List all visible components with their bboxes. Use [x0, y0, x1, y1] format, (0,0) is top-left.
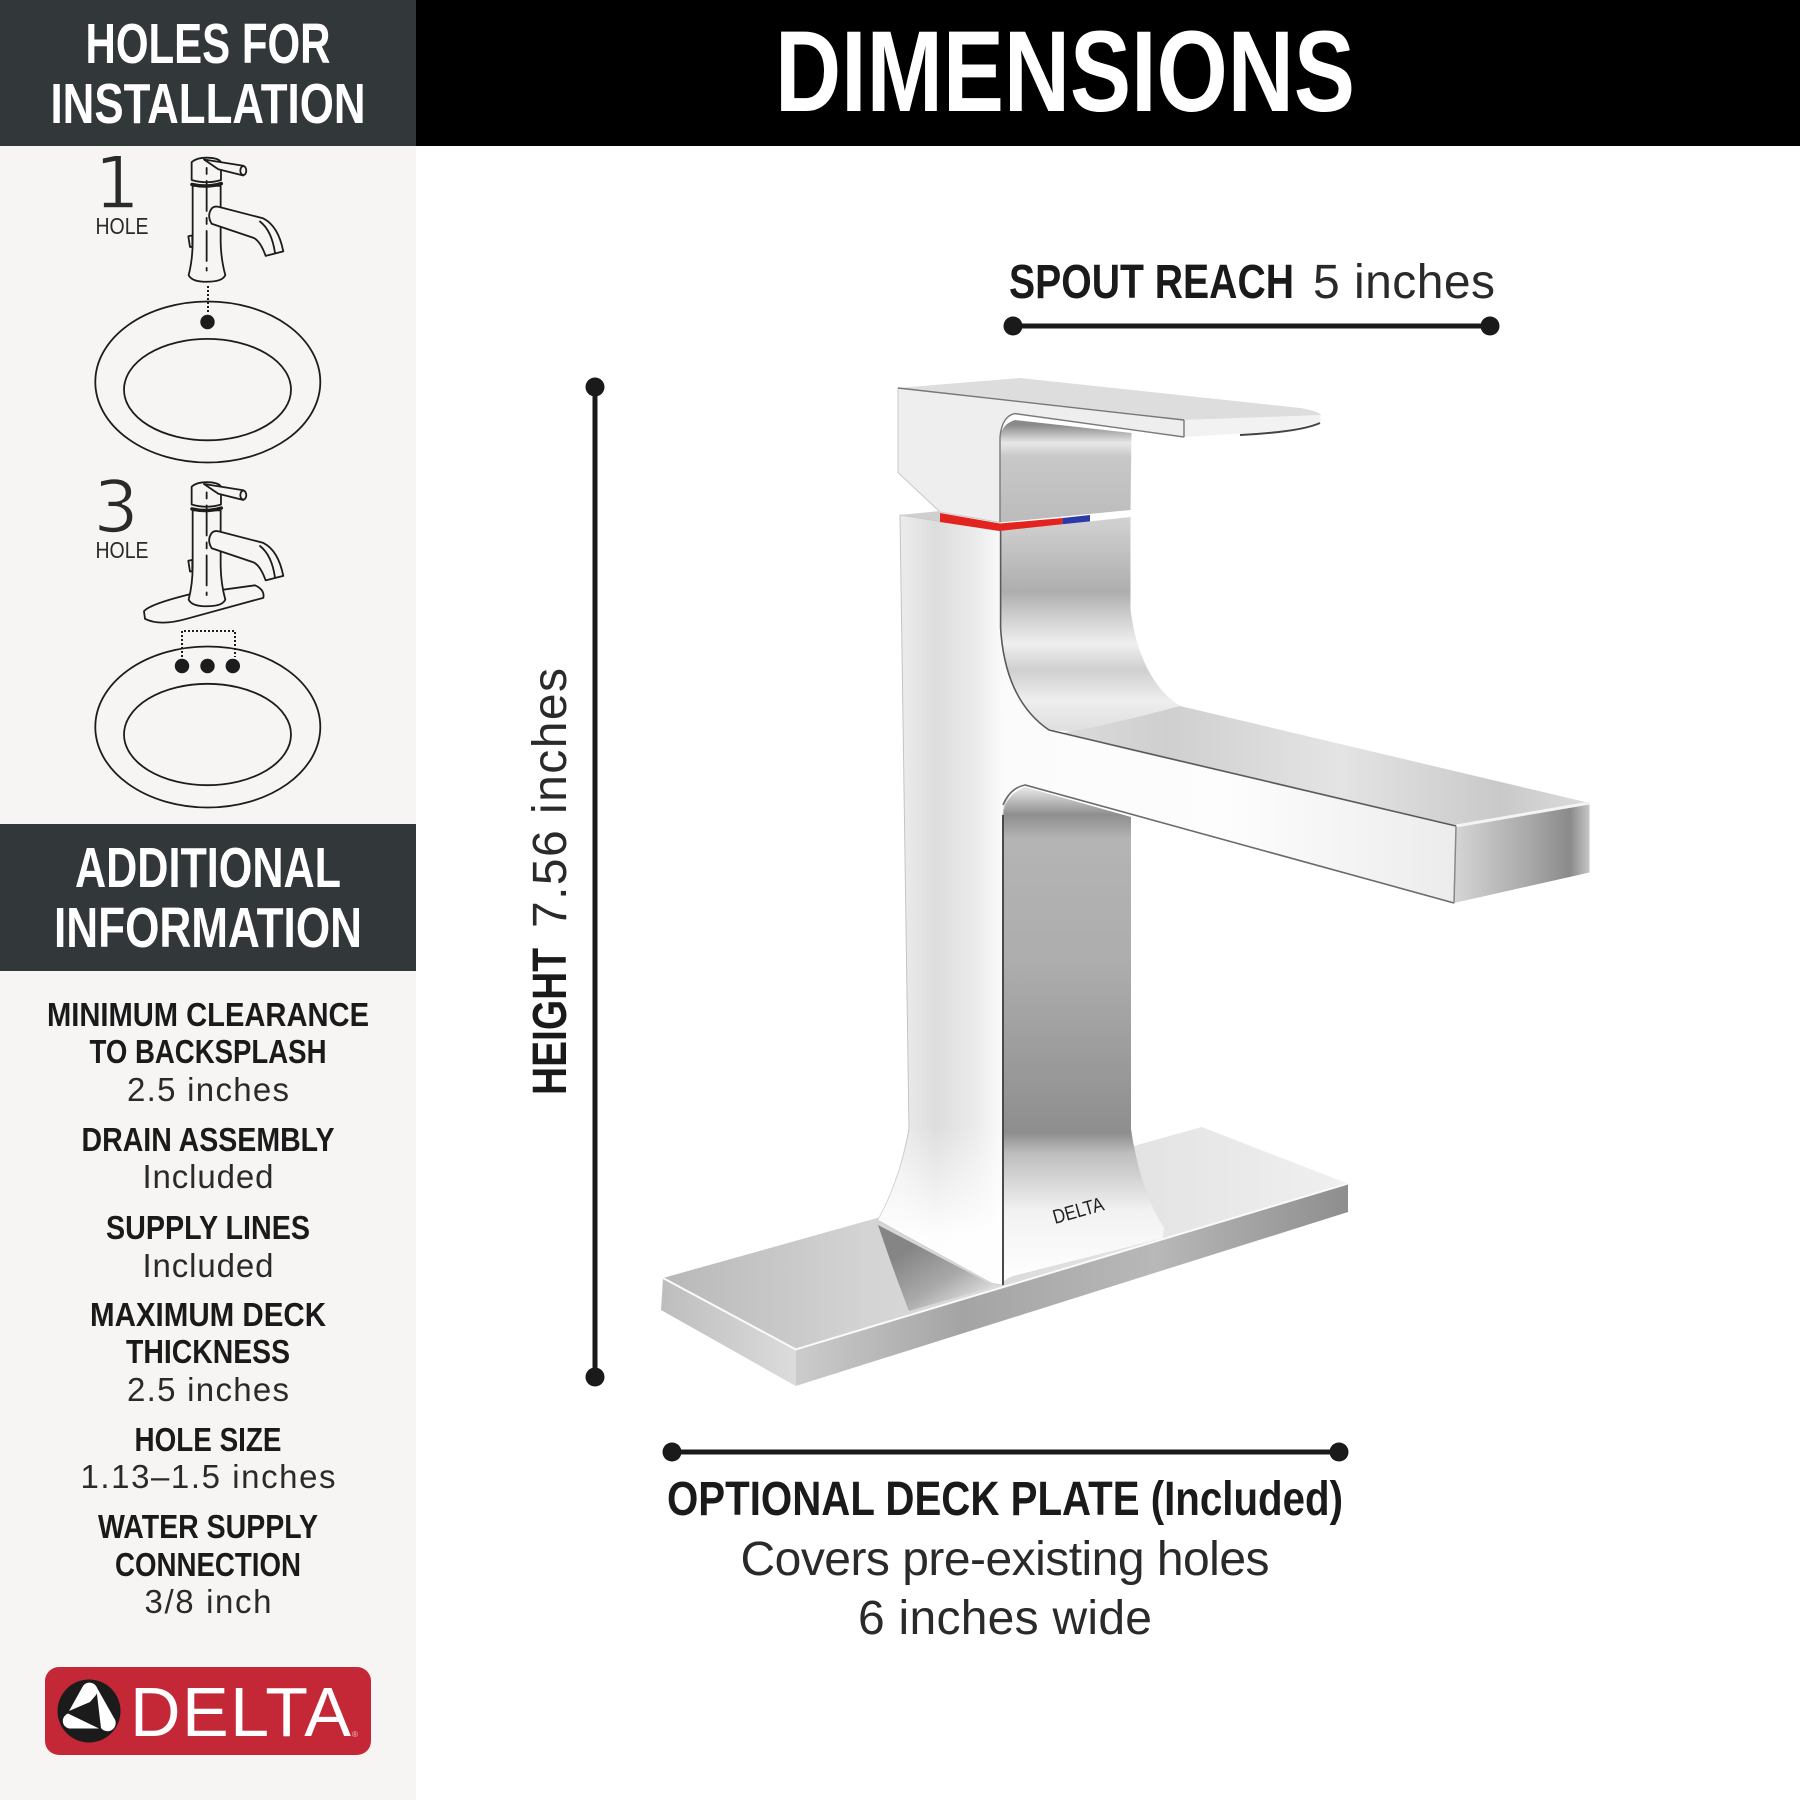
hot indicator band [940, 513, 1063, 531]
upper neck with chrome reflections [1001, 517, 1300, 745]
column left face [878, 515, 1456, 1285]
text block: minimum clearance: 2.5 inches [127, 1071, 289, 1108]
label: 3 hole: 3 [93, 465, 139, 549]
text block: minimum clearance: MINIMUM CLEARANCE [47, 996, 369, 1033]
icon: delta mark [58, 1680, 120, 1742]
text block: water supply connection: CONNECTION [115, 1546, 301, 1583]
text block: water supply connection: 3/8 inch [144, 1583, 272, 1620]
sidebar background panel [0, 0, 416, 1800]
text block: hole size [80, 1421, 336, 1495]
dimension: optional deck plate: 6 inches wide [858, 1592, 1152, 1645]
handle tip [1184, 415, 1321, 437]
text block: minimum clearance: TO BACKSPLASH [90, 1033, 326, 1070]
text block: drain assembly: DRAIN ASSEMBLY [82, 1121, 334, 1158]
panel: holes for installation header: INSTALLATION [50, 72, 366, 136]
text block: supply lines: Included [142, 1247, 274, 1284]
text block: maximum deck thickness: 2.5 inches [127, 1371, 289, 1408]
diagram: three hole installation [93, 465, 320, 808]
text block: drain assembly: Included [142, 1158, 274, 1195]
text block: supply lines: SUPPLY LINES [106, 1209, 310, 1246]
cold indicator band [1063, 515, 1090, 524]
spout arm front [1001, 690, 1456, 903]
edge lines [1001, 531, 1456, 826]
dimension: height: HEIGHT [524, 948, 577, 1095]
dimension: spout reach: SPOUT REACH [1009, 256, 1294, 309]
text block: hole size: 1.13–1.5 inches [80, 1458, 336, 1495]
logo: delta: DELTA [130, 1673, 351, 1751]
label: 3 hole: HOLE [96, 537, 148, 563]
icon: deck plate [144, 585, 264, 623]
text block: maximum deck thickness: MAXIMUM DECK [90, 1296, 326, 1333]
diagram: one hole installation [94, 141, 320, 462]
text block: maximum deck thickness [90, 1296, 326, 1408]
dotted connector [182, 631, 235, 657]
spout top surface [1062, 706, 1590, 826]
dimension: height: 7.56 inches [524, 668, 577, 928]
handle top [898, 378, 1321, 420]
handle front face [898, 388, 1184, 522]
text block: water supply connection [98, 1508, 318, 1620]
text block: hole size: HOLE SIZE [134, 1421, 282, 1458]
label: 1 hole: 1 [94, 141, 140, 225]
lower neck right face [1001, 787, 1164, 1285]
icon: faucet [188, 158, 283, 282]
text block: maximum deck thickness: THICKNESS [126, 1333, 290, 1370]
panel: additional information header: INFORMATION [54, 896, 362, 960]
flare highlight [878, 1110, 1003, 1285]
column top disk [900, 511, 1000, 531]
text block: minimum clearance [47, 996, 369, 1108]
dimension: spout reach [1004, 256, 1500, 336]
handle neck [1000, 420, 1132, 522]
panel: additional information header [0, 824, 416, 971]
title: dimensions banner: DIMENSIONS [775, 8, 1355, 136]
logo: delta [45, 1667, 371, 1755]
deck plate [661, 1127, 1348, 1386]
text block: supply lines [106, 1209, 310, 1284]
text block: water supply connection: WATER SUPPLY [98, 1508, 318, 1545]
spout end [1454, 803, 1590, 903]
dimension: height [524, 378, 604, 1386]
brand mark: DELTA [1050, 1193, 1107, 1229]
icon: oval sink [95, 302, 320, 462]
illustration: chrome faucet [661, 378, 1590, 1386]
dimension: optional deck plate: Covers pre-existing holes [740, 1533, 1270, 1586]
panel: holes for installation header: HOLES FOR [86, 12, 330, 76]
title: dimensions banner [416, 0, 1800, 146]
icon: oval sink [95, 646, 320, 808]
label: 1 hole: HOLE [96, 213, 148, 239]
dimension: optional deck plate: OPTIONAL DECK PLATE (Included) [667, 1473, 1343, 1526]
dimension: spout reach: 5 inches [1313, 256, 1495, 309]
panel: additional information header: ADDITIONAL [75, 836, 341, 900]
logo: delta: ® [352, 1730, 358, 1739]
dotted connector [207, 286, 209, 313]
icon: faucet [188, 482, 283, 606]
panel: holes for installation header [0, 0, 416, 146]
text block: drain assembly [82, 1121, 334, 1195]
dimension: optional deck plate [662, 1442, 1348, 1645]
